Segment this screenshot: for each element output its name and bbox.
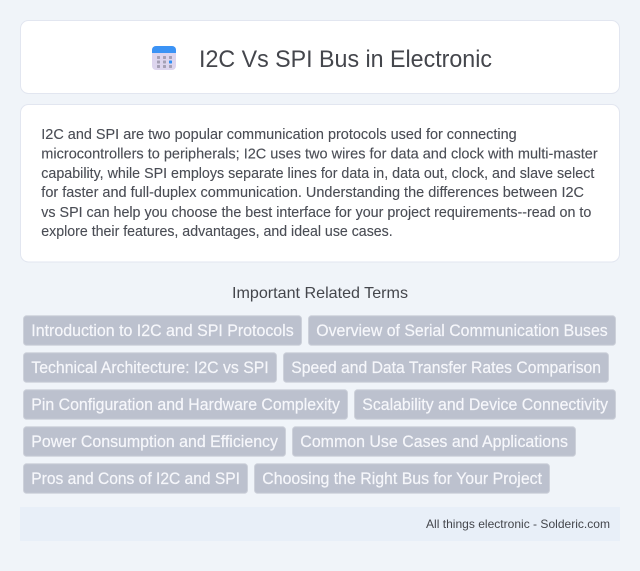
panel: related term tags: [24, 316, 616, 493]
tag: choosing: [254, 464, 550, 493]
paragraph text: I2C and SPI are two popular communication protocols used for connecting: [41, 127, 517, 143]
icon: calendar grid: [152, 46, 176, 70]
tag: speed: Speed and Data Transfer Rates Comparison: [291, 359, 601, 377]
tag: overview: [308, 316, 616, 345]
footer: [20, 507, 620, 541]
tag: scalability: Scalability and Device Connectivity: [362, 396, 609, 414]
tag: scalability: [354, 390, 616, 419]
footer: All things electronic - Solderic.com: [426, 517, 610, 531]
tag: introduction: [24, 316, 302, 345]
header panel: [20, 20, 620, 94]
tag: introduction: Introduction to I2C and SPI Protocols: [31, 322, 294, 340]
tag: pros and cons: [24, 464, 248, 493]
paragraph text: explore their features, advantages, and ideal use cases.: [41, 224, 393, 240]
tag: power: Power Consumption and Efficiency: [31, 433, 279, 451]
tag: pin configuration: Pin Configuration and Hardware Complexity: [31, 396, 341, 414]
paragraph text: [41, 127, 598, 240]
paragraph text: for faster and full-duplex communication. Understanding the differences between I2C: [41, 185, 584, 201]
paragraph text: capability, while SPI employs separate lines for data in, data out, clock, and slave select: [41, 166, 594, 182]
paragraph text: microcontrollers to peripherals; I2C uses two wires for data and clock with multi-master: [41, 146, 598, 162]
tag: power: [24, 427, 286, 456]
paragraph text: vs SPI can help you choose the best interface for your project requirements--read on to: [41, 205, 591, 221]
tag: pros and cons: Pros and Cons of I2C and SPI: [31, 470, 240, 488]
heading: related terms: Important Related Terms: [232, 285, 408, 302]
tag: use cases: Common Use Cases and Applications: [300, 433, 568, 451]
tag: speed: [284, 353, 608, 382]
panel: introduction paragraph: [20, 104, 620, 262]
tag: overview: Overview of Serial Communication Buses: [316, 322, 608, 340]
tag: architecture: [24, 353, 276, 382]
tag: pin configuration: [24, 390, 348, 419]
tag: choosing: Choosing the Right Bus for Your Project: [262, 470, 542, 488]
tag: architecture: Technical Architecture: I2C vs SPI: [31, 359, 269, 377]
title: I2C Vs SPI Bus in Electronic: [199, 46, 492, 73]
tag: use cases: [292, 427, 576, 456]
